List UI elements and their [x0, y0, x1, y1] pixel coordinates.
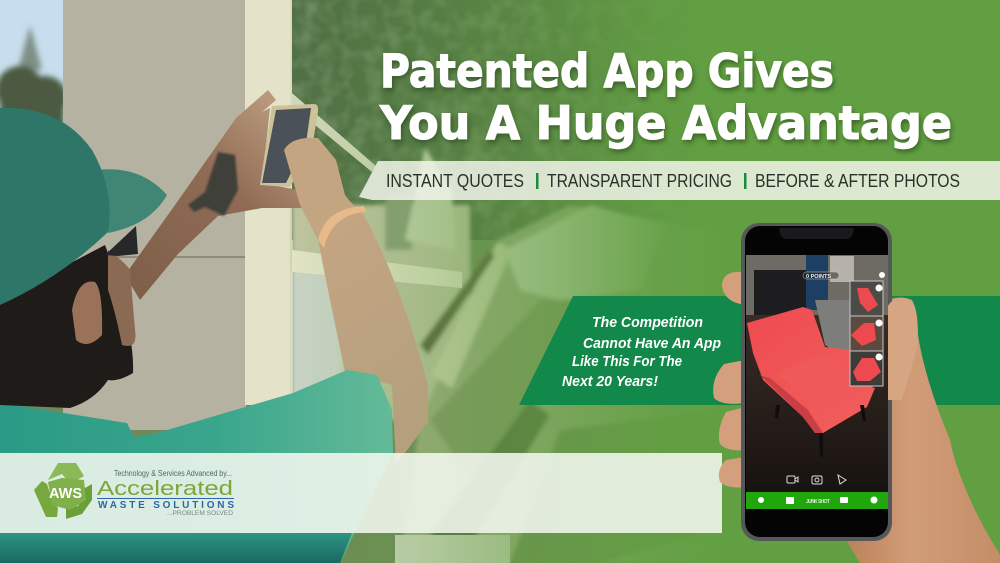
green gradient overlay: [290, 0, 735, 563]
scorpion tattoo: [188, 152, 238, 216]
recycle logo: AWS: [49, 485, 82, 502]
feature strip: BEFORE & AFTER PHOTOS: [755, 171, 960, 191]
callout text: [562, 315, 721, 390]
company name: Technology & Services Advanced by...: [114, 469, 232, 478]
worker photographing debris: [0, 90, 428, 563]
cap visor: [97, 169, 167, 233]
red chair: [747, 307, 875, 457]
app navigation bar: [746, 492, 888, 509]
feature strip: TRANSPARENT PRICING: [547, 171, 732, 191]
fingers: [713, 272, 745, 487]
phone in hand: [260, 104, 318, 187]
points badge: 0 POINTS: [806, 274, 831, 280]
shirt: [0, 370, 393, 563]
green callout band: [519, 296, 1000, 405]
right arm and hand: [284, 138, 428, 465]
camera controls: [787, 475, 846, 484]
app camera view: [746, 255, 888, 495]
phone notch: [779, 228, 854, 239]
recycle logo: [34, 463, 92, 519]
title: Patented App Gives: [380, 44, 834, 98]
bracelet: [318, 206, 366, 248]
smartphone: [741, 223, 892, 541]
glasses: [105, 226, 138, 256]
thumb: [888, 298, 918, 400]
feature strip: INSTANT QUOTES: [386, 171, 524, 191]
thumbnails: [850, 281, 883, 386]
feature strip: [359, 161, 1000, 200]
company name: Accelerated: [97, 478, 233, 500]
green background, right side: [732, 0, 1000, 563]
company name: [97, 469, 234, 517]
app navigation bar: JUNK SHOT: [806, 499, 830, 505]
company name: WASTE SOLUTIONS: [98, 500, 234, 511]
callout text: The Competition: [592, 315, 703, 331]
forearm and left hand: [125, 90, 302, 300]
logo banner: [0, 453, 722, 533]
points badge: [803, 272, 839, 280]
callout text: Cannot Have An App: [583, 336, 721, 352]
company name: ...PROBLEM SOLVED: [167, 510, 233, 517]
callout text: Like This For The: [572, 354, 682, 370]
callout text: Next 20 Years!: [562, 374, 658, 390]
cap: [0, 108, 110, 305]
title: [379, 44, 952, 150]
head: hair, beard, ear: [0, 245, 133, 408]
hand behind phone: [713, 272, 1000, 563]
title: You A Huge Advantage: [379, 96, 952, 150]
